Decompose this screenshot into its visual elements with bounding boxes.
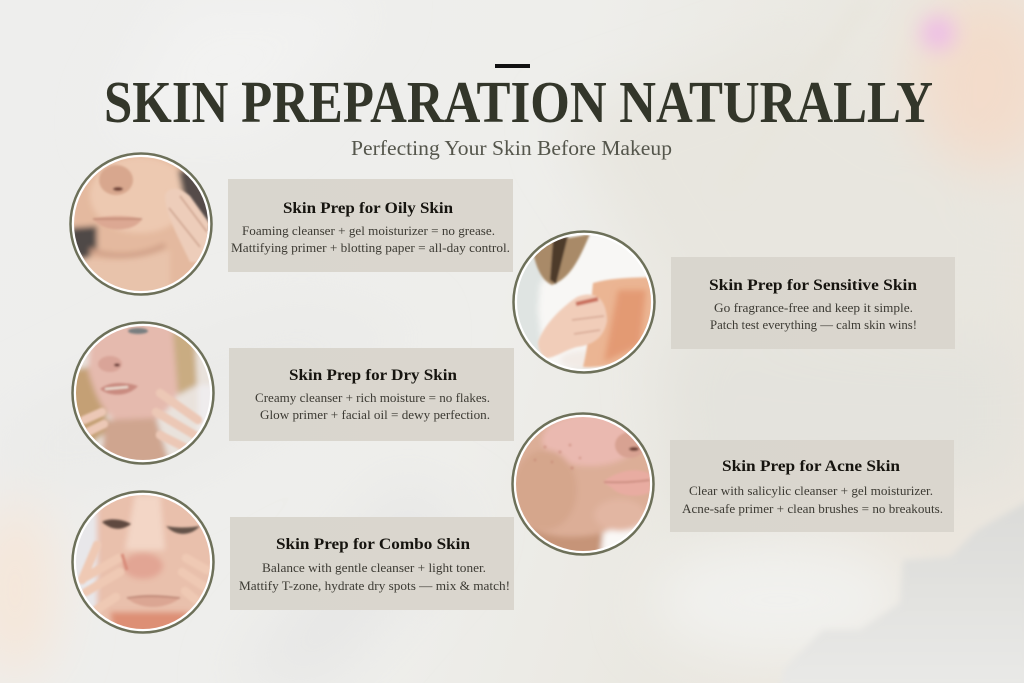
panel: sensitive skin: Go fragrance-free and keep it simple. [714, 300, 913, 315]
photo: combo skin [70, 490, 215, 640]
panel: acne skin [670, 440, 954, 532]
panel: dry skin: Glow primer + facial oil = dewy perfection. [260, 407, 490, 422]
panel: sensitive skin [671, 257, 955, 349]
panel: acne skin: Clear with salicylic cleanser + gel moisturizer. [689, 483, 933, 498]
panel: oily skin: Skin Prep for Oily Skin [283, 200, 453, 217]
panel: acne skin: Acne-safe primer + clean brushes = no breakouts. [682, 501, 943, 516]
photo: dry skin [70, 320, 216, 465]
panel: oily skin [228, 179, 513, 272]
panel: acne skin: Skin Prep for Acne Skin [722, 458, 900, 475]
panel: dry skin: Skin Prep for Dry Skin [289, 367, 457, 384]
photo: oily skin [70, 150, 215, 300]
panel: dry skin [229, 348, 514, 441]
panel: combo skin: Mattify T-zone, hydrate dry spots — mix & match! [239, 578, 510, 593]
panel: oily skin: Mattifying primer + blotting paper = all-day control. [231, 240, 510, 255]
panel: sensitive skin: Skin Prep for Sensitive Skin [709, 277, 917, 294]
panel: combo skin: Skin Prep for Combo Skin [276, 536, 470, 553]
subtitle: Perfecting Your Skin Before Makeup [351, 136, 672, 160]
panel: sensitive skin: Patch test everything — calm skin wins! [710, 317, 917, 332]
panel: dry skin: Creamy cleanser + rich moisture = no flakes. [255, 390, 490, 405]
photo: acne skin [510, 412, 665, 560]
title accent bar [495, 64, 530, 68]
panel: oily skin: Foaming cleanser + gel moisturizer = no grease. [242, 223, 495, 238]
photo: sensitive skin [512, 230, 660, 375]
panel: combo skin [230, 517, 514, 610]
panel: combo skin: Balance with gentle cleanser + light toner. [262, 560, 486, 575]
